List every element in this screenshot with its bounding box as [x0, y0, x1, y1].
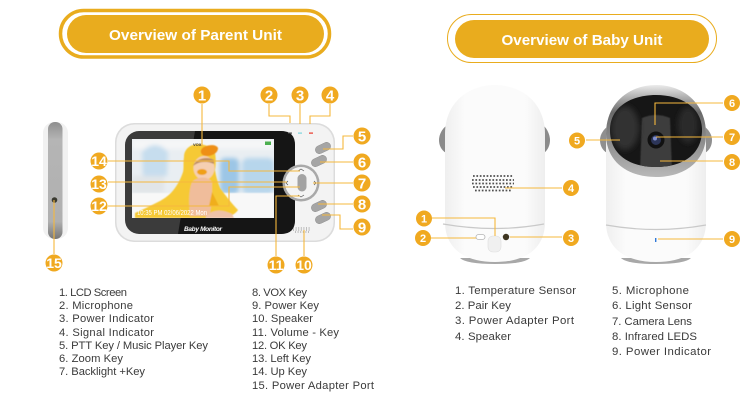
power adapter port — [503, 234, 509, 240]
pair key — [476, 234, 485, 240]
legend: parent unit keys 8-15: 10. Speaker — [252, 313, 313, 325]
side buttons — [310, 141, 332, 225]
legend: parent unit keys 8-15: 11. Volume - Key — [252, 327, 339, 339]
pacifier — [197, 169, 207, 175]
callouts: baby unit: 1 — [421, 214, 427, 226]
callouts: baby unit: 4 — [568, 183, 575, 195]
callouts: parent unit: 8 — [358, 196, 366, 214]
callouts: baby unit: 7 — [729, 132, 735, 144]
screen bezel — [125, 131, 295, 234]
towel fold — [209, 192, 219, 206]
legend: baby unit items 5-9: 8. Infrared LEDS — [612, 331, 697, 343]
duck bill — [201, 145, 218, 156]
baby body — [189, 178, 212, 216]
heading: overview of parent unit: Overview of Parent Unit — [109, 27, 282, 44]
device: parent unit front view — [115, 123, 335, 242]
callouts: baby unit: 5 — [574, 136, 580, 148]
callouts: parent unit: 13 — [91, 176, 107, 192]
callouts: parent unit: 4 — [326, 88, 335, 104]
heading: overview of parent unit — [60, 10, 330, 57]
legend: baby unit items 5-9: 9. Power Indicator — [612, 346, 711, 358]
legend: parent unit keys 1-7: 5. PTT Key / Music Player Key — [59, 340, 208, 352]
callouts: parent unit: 14 — [91, 153, 107, 169]
screen overlay: VOX: VOX — [193, 142, 202, 147]
speaker grille — [293, 228, 311, 232]
callouts: parent unit: 9 — [358, 220, 366, 236]
legend: parent unit keys 1-7: 2. Microphone — [59, 300, 133, 312]
legend: parent unit keys 1-7 — [59, 287, 208, 378]
callouts: parent unit: 2 — [265, 88, 273, 104]
screen overlay: battery — [265, 142, 271, 145]
legend: parent unit keys 8-15: 8. VOX Key — [252, 287, 307, 299]
screen photo: baby in duck hood — [132, 139, 274, 218]
panel: baby unit — [415, 14, 740, 358]
indicators — [288, 132, 313, 134]
legend: baby unit items 1-4 — [455, 285, 576, 343]
legend: baby unit items 1-4: 2. Pair Key — [455, 300, 511, 312]
callouts: parent unit: 6 — [358, 154, 366, 172]
callouts: baby unit: 9 — [729, 234, 735, 246]
callouts: parent unit: 3 — [296, 88, 304, 104]
heading: overview of baby unit: Overview of Baby Unit — [502, 32, 662, 49]
power indicator — [655, 238, 656, 242]
legend: parent unit keys 8-15: 9. Power Key — [252, 300, 319, 312]
legend: parent unit keys 1-7: 7. Backlight +Key — [59, 366, 145, 378]
legend: parent unit keys 8-15: 12. OK Key — [252, 340, 307, 352]
callouts: baby unit: 8 — [729, 157, 735, 169]
legend: baby unit items 1-4: 3. Power Adapter Port — [455, 315, 575, 327]
screen overlay: date and time: 10:35 PM 02/06/2022 Mon — [137, 208, 207, 217]
legend: baby unit items 5-9 — [612, 285, 711, 358]
legend: parent unit keys 1-7: 1. LCD Screen — [59, 287, 127, 299]
hood and towel — [135, 144, 238, 218]
panel: parent unit — [43, 10, 375, 392]
camera head shell — [606, 85, 706, 177]
callouts: parent unit: 15 — [46, 255, 62, 271]
device: parent unit side view — [43, 122, 68, 239]
callouts: parent unit: 1 — [198, 88, 206, 104]
baby legs — [206, 210, 234, 218]
heading: overview of baby unit — [448, 14, 716, 62]
device: baby unit back view — [439, 85, 550, 264]
speaker grille — [472, 176, 514, 190]
legend: parent unit keys 1-7: 6. Zoom Key — [59, 353, 123, 365]
legend: parent unit keys 8-15: 13. Left Key — [252, 353, 311, 365]
legend: parent unit keys 1-7: 3. Power Indicator — [59, 313, 154, 325]
legend: parent unit keys 8-15 — [252, 287, 375, 392]
legend: baby unit items 5-9: 7. Camera Lens — [612, 316, 692, 328]
callouts: parent unit: 5 — [358, 128, 366, 146]
directional pad — [282, 164, 320, 202]
temperature sensor — [488, 236, 501, 252]
callouts: baby unit: 3 — [568, 233, 574, 245]
brand: Baby Monitor: Baby Monitor — [184, 226, 222, 233]
camera visor — [610, 95, 702, 167]
callouts: parent unit: 12 — [91, 198, 107, 214]
callouts: parent unit: 11 — [269, 257, 284, 273]
callouts: parent unit: 7 — [358, 176, 366, 192]
legend: parent unit keys 8-15: 15. Power Adapter Port — [252, 380, 375, 392]
legend: baby unit items 1-4: 1. Temperature Sensor — [455, 285, 576, 297]
callouts: baby unit: 6 — [729, 98, 735, 110]
legend: parent unit keys 8-15: 14. Up Key — [252, 366, 307, 378]
legend: baby unit items 5-9: 5. Microphone — [612, 285, 689, 297]
callouts: parent unit — [46, 86, 370, 274]
legend: baby unit items 1-4: 4. Speaker — [455, 331, 511, 343]
callouts: baby unit: 2 — [420, 233, 426, 245]
baby face — [194, 156, 214, 180]
legend: parent unit keys 1-7: 4. Signal Indicator — [59, 327, 154, 339]
callouts: parent unit: 10 — [296, 257, 312, 273]
camera lens — [648, 132, 664, 148]
device: baby unit front view — [600, 85, 712, 264]
callouts: baby unit — [415, 95, 740, 247]
legend: baby unit items 5-9: 6. Light Sensor — [612, 300, 692, 312]
